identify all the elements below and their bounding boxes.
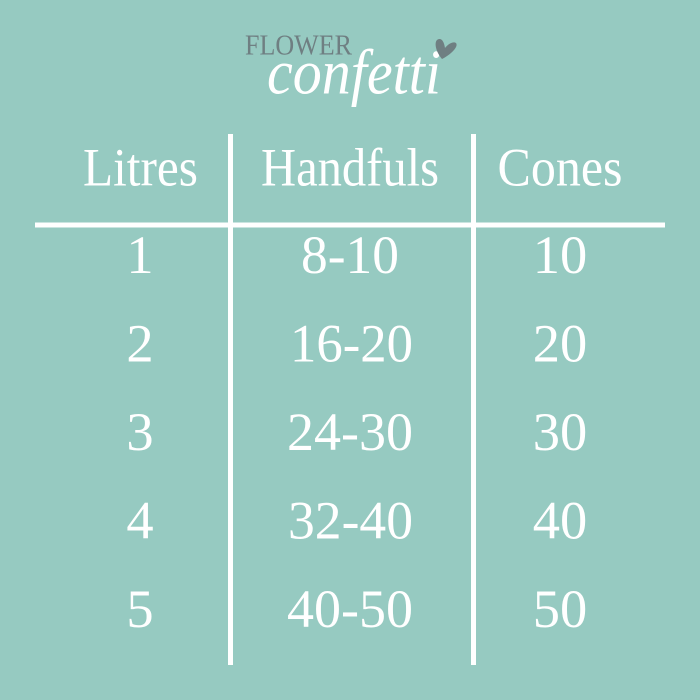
column header: Litres: Litres — [83, 138, 198, 198]
row 4: 32-40 — [288, 490, 413, 550]
row 5: 5 — [126, 578, 154, 639]
row 2: 16-20 — [290, 312, 413, 374]
row 1: 8-10 — [301, 224, 399, 285]
logo — [245, 30, 457, 108]
table grid lines — [35, 134, 665, 665]
row 2: 2 — [126, 312, 154, 374]
row 3 — [126, 401, 587, 462]
logo word: confetti: confetti — [267, 36, 441, 108]
row 1 — [126, 224, 587, 285]
row 5: 40-50 — [287, 578, 413, 639]
row 5: 50 — [533, 578, 587, 639]
row 5 — [126, 578, 587, 639]
logo word: FLOWER: FLOWER — [245, 30, 352, 62]
row 2: 20 — [533, 312, 587, 374]
row 3: 3 — [126, 401, 154, 462]
row 1: 1 — [126, 224, 154, 285]
row 4: 4 — [126, 490, 154, 550]
row 3: 24-30 — [287, 401, 413, 462]
row 4 — [126, 490, 587, 550]
column header: Handfuls: Handfuls — [261, 138, 439, 198]
row 3: 30 — [533, 401, 587, 462]
row 2 — [126, 312, 587, 374]
row 4: 40 — [533, 490, 587, 550]
icon: heart — [436, 39, 457, 59]
row 1: 10 — [533, 224, 587, 285]
column header: Cones: Cones — [498, 138, 622, 198]
